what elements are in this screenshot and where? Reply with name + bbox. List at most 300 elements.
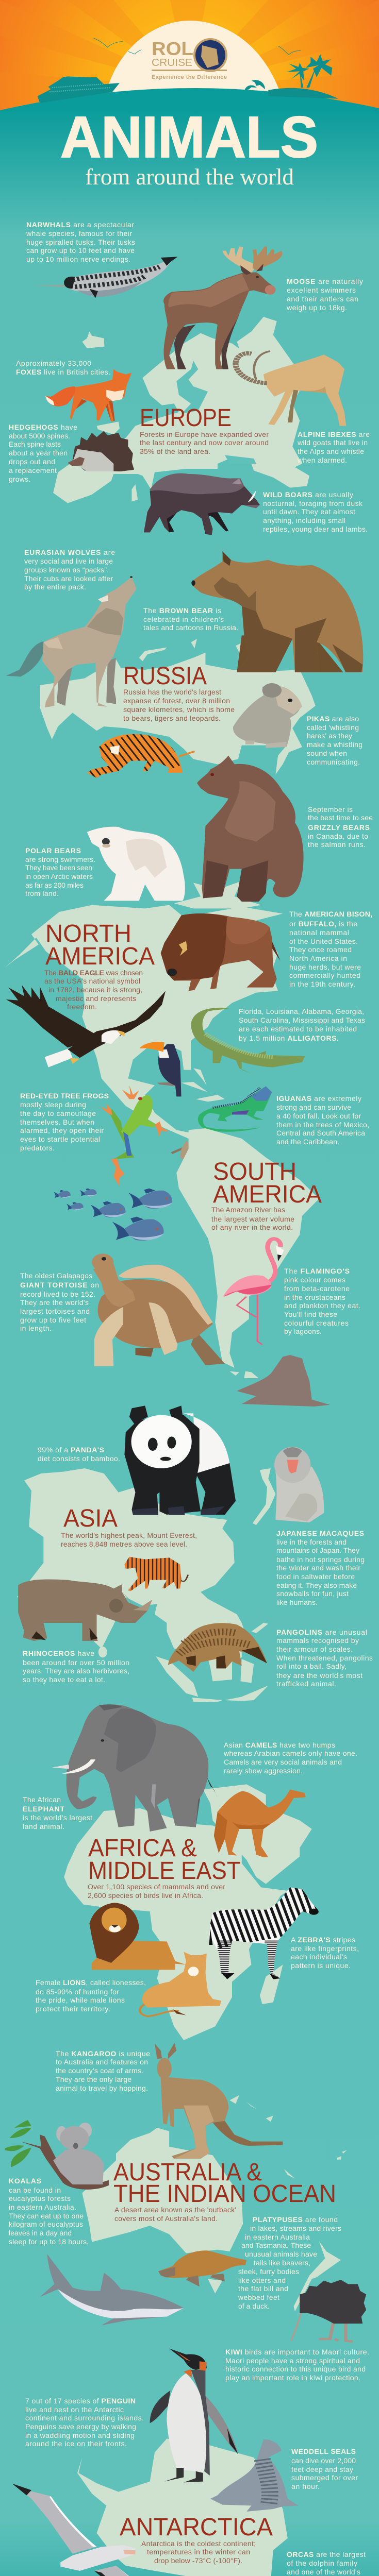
text: hedgehogs: HEDGEHOGS have <box>9 423 77 431</box>
text: grizzly bears: GRIZZLY BEARS <box>308 823 370 832</box>
text: Asia fact <box>61 1531 197 1548</box>
text: giant tortoise: record lived to be 152. <box>20 1290 95 1298</box>
text: alpine ibexes: ALPINE IBEXES are <box>298 430 370 438</box>
text: weddell seals: an hour. <box>291 2482 320 2490</box>
text: pangolins: mammals recognised by <box>276 1636 359 1645</box>
text: giant tortoise: The oldest Galapagos <box>20 1272 92 1280</box>
heading: Australia and the Indian Ocean: THE INDIAN OCEAN <box>113 2180 336 2208</box>
text: hedgehogs: about a year then <box>9 449 68 457</box>
panel: antarctica <box>12 2348 370 2576</box>
logo: ROL Cruise: ROL <box>152 38 193 59</box>
animal: kangaroo <box>155 2043 283 2159</box>
text: polar bears: POLAR BEARS <box>25 846 81 855</box>
text: narwhals: NARWHALS are a spectacular <box>26 221 134 229</box>
animal: alpine ibex <box>236 351 346 426</box>
text: iguanas: IGUANAS are extremely <box>276 1094 361 1103</box>
text: flamingo: colourful creatures <box>284 1319 349 1327</box>
text: Asia fact: The world's highest peak, Mount Everest, <box>61 1531 197 1539</box>
text: Europe fact: 35% of the land area. <box>140 447 210 455</box>
text: flamingo: pink colour comes <box>284 1276 345 1284</box>
animal: koala <box>5 2120 109 2190</box>
text: polar bears <box>25 846 95 897</box>
text: camels: Asian CAMELS have two humps <box>224 1741 335 1749</box>
text: alligators: Florida, Louisiana, Alabama, Georgia, <box>239 1007 364 1015</box>
text: moose: and their antlers can <box>287 295 358 303</box>
text: weddell seals: can dive over 2,000 <box>291 2456 356 2465</box>
text: pikas: hares' as they <box>307 732 352 740</box>
text: giant tortoise: GIANT TORTOISE on <box>20 1281 99 1289</box>
text: eurasian wolves: EURASIAN WOLVES are <box>24 548 115 556</box>
text: flamingo: in the crustaceans <box>284 1293 345 1301</box>
text: iguanas: and the Caribbean. <box>276 1138 339 1146</box>
text: platypuses: webbed feet <box>238 2293 279 2301</box>
text: orcas <box>287 2550 370 2576</box>
animal: great white shark <box>40 2254 184 2325</box>
panel: south america <box>20 1128 360 1406</box>
text: Russia fact <box>123 688 235 722</box>
text: hedgehogs: a replacement <box>9 466 57 474</box>
animal: flamingo <box>224 1239 284 1345</box>
text: moose: weigh up to 18kg. <box>286 303 347 312</box>
text: penguins: in a waddling motion and sliding <box>25 2431 135 2439</box>
text: narwhals: huge spiralled tusks. Their tusks <box>26 238 135 246</box>
text: Australia fact <box>114 2206 236 2223</box>
animal: eurasian wolf <box>6 576 137 707</box>
text: Africa fact: 2,600 species of birds live in Africa. <box>88 1891 203 1900</box>
panel: africa and middle east <box>23 1704 359 2040</box>
text: wild boars: anything, including small <box>263 516 345 524</box>
text: rhinoceros <box>23 1649 129 1684</box>
text: Europe fact: Forests in Europe have expanded over <box>140 430 269 438</box>
icon: dolphins <box>244 80 265 90</box>
panel: europe <box>9 221 370 535</box>
text: panda: 99% of a PANDA'S <box>38 1446 104 1454</box>
text: Asia fact: reaches 8,848 metres above sea level. <box>61 1540 187 1548</box>
text: polar bears: in open Arctic waters <box>25 872 93 880</box>
animal: alligator <box>191 1008 305 1073</box>
text: giant tortoise: grow up to five feet <box>20 1316 86 1324</box>
text: weddell seals <box>291 2447 358 2490</box>
text: camels: Camels are very social animals and <box>224 1758 342 1766</box>
text: japanese macaques: mountains of Japan. They <box>276 1546 359 1554</box>
text: grizzly bears: September is <box>308 805 353 814</box>
animal: grizzly bear <box>197 756 304 902</box>
text: american bison: commercially hunted <box>289 971 360 979</box>
text: hedgehogs: about 5000 spines. <box>9 432 70 440</box>
text: camels: whereas Arabian camels only have one. <box>223 1749 357 1757</box>
text: kangaroo: They are the only large <box>56 2075 131 2083</box>
text: penguins: Penguins save energy by walking <box>25 2422 136 2431</box>
text: iguanas: strong and can survive <box>276 1103 351 1111</box>
text: eurasian wolves: groups known as “packs”. <box>24 566 109 574</box>
heading: Australia and the Indian Ocean <box>113 2159 336 2208</box>
text: polar bears: They have been seen <box>25 863 92 872</box>
text: koalas: sleep for up to 18 hours. <box>9 2238 89 2246</box>
icon: seagulls <box>94 38 301 55</box>
text: kiwi: KIWI birds are important to Maori culture. <box>225 2348 369 2356</box>
text: american bison: or BUFFALO, is the <box>289 920 357 928</box>
text: platypuses: like otters and <box>238 2276 286 2284</box>
heading: North America: NORTH <box>45 920 131 947</box>
animal: fox <box>45 369 131 421</box>
text: alpine ibexes: the Alps and whistle <box>298 447 364 455</box>
text: lions: the pride, while male lions <box>36 1996 125 2004</box>
text: red-eyed tree frogs: eyes to startle potential <box>20 1135 100 1143</box>
text: flamingo: from beta-carotene <box>284 1284 350 1293</box>
text: Amazon fact: the largest water volume <box>211 1215 294 1223</box>
text: kiwi <box>225 2348 369 2382</box>
text: red-eyed tree frogs <box>20 1092 109 1152</box>
heading: South America: AMERICA <box>213 1181 322 1208</box>
text: platypuses: sleek, furry bodies <box>238 2267 299 2276</box>
text: Australia fact: covers most of Australia's land. <box>114 2214 218 2223</box>
text: red-eyed tree frogs: the day to camouflage <box>20 1109 96 1117</box>
text: american bison: in the 19th century. <box>289 980 355 988</box>
text: alpine ibexes <box>297 430 370 464</box>
text: platypuses: PLATYPUSES are found <box>253 2215 338 2224</box>
heading: Russia: RUSSIA <box>123 663 207 690</box>
text: giant tortoise <box>20 1272 99 1332</box>
text: platypuses: in eastern Australia <box>245 2233 310 2241</box>
panel: asia <box>17 1405 373 1702</box>
icon: cruise ship <box>38 76 120 103</box>
text: eurasian wolves <box>24 548 115 591</box>
text: american bison: The AMERICAN BISON, <box>289 910 372 918</box>
text: narwhals: up to 10 million nerve endings. <box>26 255 130 263</box>
text: giant tortoise: They are the world's <box>20 1298 89 1307</box>
text: platypuses: and Tasmania. These <box>241 2241 311 2249</box>
logo: ROL Cruise: CRUISE <box>152 57 192 69</box>
text: moose <box>286 277 363 312</box>
heading: Africa and Middle East: MIDDLE EAST <box>88 1857 241 1885</box>
animal: zebra <box>209 1887 319 1980</box>
heading: Europe: EUROPE <box>140 404 232 432</box>
text: flamingo: and plankton they eat. <box>284 1301 360 1310</box>
text: platypuses: unusual animals have <box>245 2250 317 2258</box>
heading: North America: AMERICA <box>45 943 155 970</box>
animal: elephant seal <box>237 1355 330 1406</box>
text: koalas: kilogram of eucalyptus <box>9 2220 83 2228</box>
map: south america <box>176 1128 319 1378</box>
animal: king penguin <box>150 2348 238 2482</box>
text: polar bears: from land. <box>25 889 59 897</box>
text: penguins: 7 out of 17 species of PENGUIN <box>25 2397 136 2405</box>
text: lions: do 85-90% of hunting for <box>36 1988 119 1996</box>
text: Africa fact: Over 1,100 species of mammals and over <box>88 1883 225 1891</box>
text: Antarctica fact: Antarctica is the coldest continent; <box>141 2539 256 2548</box>
text: iguanas: them in the trees of Mexico, <box>276 1121 369 1129</box>
text: american bison: national mammal <box>289 928 349 937</box>
text: wild boars: until dawn. They eat almost <box>263 507 355 516</box>
text: elephant: is the world's largest <box>23 1814 92 1822</box>
text: hedgehogs: grows. <box>9 475 30 483</box>
heading: Australia and the Indian Ocean: AUSTRALIA & <box>113 2159 262 2186</box>
text: narwhals <box>26 221 135 263</box>
text: grizzly bears: the salmon runs. <box>308 840 366 849</box>
map: asia <box>17 1468 275 1702</box>
text: koalas: leaves in a day and <box>9 2229 72 2237</box>
animal: japanese macaque <box>274 1447 324 1522</box>
text: moose: excellent swimmers <box>287 286 356 294</box>
text: wild boars: WILD BOARS are usually <box>263 490 353 499</box>
text: japanese macaques <box>276 1529 365 1606</box>
animal: rhinoceros <box>18 1580 152 1641</box>
text: american bison: They once roamed <box>289 945 352 954</box>
animal: kiwi <box>291 2280 366 2342</box>
animal: polar bear <box>87 827 185 901</box>
heading: Antarctica: ANTARCTICA <box>120 2514 273 2541</box>
text: pikas: communicating. <box>307 758 360 766</box>
animal: pangolin <box>168 1623 267 1672</box>
text: kiwi: play an important role in kiwi protection. <box>225 2374 360 2382</box>
text: red-eyed tree frogs: mostly sleep during <box>20 1100 86 1109</box>
text: alligators: are each estimated to be inhabited <box>239 1025 357 1033</box>
text: penguins: around the ice on their fronts. <box>25 2439 127 2448</box>
text: pangolins: trafficked animal. <box>276 1680 336 1688</box>
text: iguanas <box>276 1094 369 1146</box>
text: flamingo: by lagoons. <box>284 1327 322 1335</box>
animal: albatross <box>12 2484 162 2576</box>
text: kangaroo: to Australia and features on <box>56 2058 148 2066</box>
text: giant tortoise: largest tortoises and <box>20 1307 90 1315</box>
animal: bengal tiger <box>123 1557 189 1591</box>
text: american bison: of the United States. <box>289 937 358 945</box>
text: pikas: sound when <box>307 749 347 757</box>
text: zebras: are like fingerprints, <box>291 1944 359 1953</box>
icon: island with palms <box>268 54 338 99</box>
text: koalas: can be found in <box>9 2186 61 2194</box>
text: foxes: FOXES live in British cities. <box>16 368 110 376</box>
text: camels <box>223 1741 357 1775</box>
text: koalas: KOALAS <box>9 2177 41 2185</box>
text: alligators: South Carolina, Mississippi and Texas <box>239 1016 365 1024</box>
text: eurasian wolves: Their cubs are looked after <box>24 574 113 583</box>
map: russia <box>40 639 316 774</box>
animal: giant panda <box>124 1405 236 1515</box>
text: american bison: huge herds, but were <box>289 963 361 971</box>
text: eurasian wolves: by the entire pack. <box>24 583 86 591</box>
animal: siberian tiger <box>87 734 194 778</box>
text: grizzly bears: in Canada, due to <box>308 832 368 840</box>
animal: toucan <box>140 1042 182 1096</box>
text: pikas: called 'whistling <box>307 723 359 732</box>
animal: bald eagle <box>6 985 166 1067</box>
text: iguanas: a 40 foot fall. Look out for <box>276 1112 361 1120</box>
text: pangolins: they are the world's most <box>276 1671 362 1680</box>
text: kangaroo: The KANGAROO is unique <box>56 2049 150 2058</box>
text: brown bear <box>143 606 238 632</box>
text: red-eyed tree frogs: RED-EYED TREE FROGS <box>20 1092 109 1100</box>
text: platypuses <box>238 2215 341 2310</box>
text: alligators: by 1.5 million ALLIGATORS. <box>239 1034 339 1042</box>
text: koalas <box>9 2177 89 2246</box>
text: penguins: live and nest on the Antarctic <box>25 2405 124 2414</box>
heading: South America: SOUTH <box>213 1158 296 1185</box>
text: flamingo <box>284 1267 360 1335</box>
text: pangolins: roll into a ball. Sadly, <box>276 1662 347 1670</box>
text: bald eagle: in 1782, because it is strong, <box>48 986 142 994</box>
animal: piranhas <box>54 1189 172 1241</box>
text: Amazon fact: The Amazon River has <box>211 1206 285 1214</box>
text: alligators <box>239 1007 365 1042</box>
text: bald eagle <box>44 969 143 1011</box>
text: bald eagle: The BALD EAGLE was chosen <box>44 969 143 977</box>
text: pangolins: When threatened, pangolins <box>276 1654 373 1662</box>
text: narwhals: can grow up to 10 feet and have <box>26 246 135 255</box>
text: Australia fact: A desert area known as the 'outback' <box>114 2206 236 2214</box>
animal: moose <box>163 246 283 369</box>
logo: ROL Cruise: Experience the Difference <box>152 74 227 80</box>
animal: wild boar <box>144 473 260 535</box>
text: kiwi: historic connection to this unique bird and <box>225 2365 366 2373</box>
heading: South America <box>213 1158 322 1208</box>
text: japanese macaques: the winter and wash their <box>276 1564 360 1572</box>
panel: header <box>0 0 379 190</box>
text: kiwi: Maori people have a strong spiritual and <box>225 2357 360 2365</box>
title: ANIMALS <box>60 105 318 170</box>
text: platypuses: tails like beavers, <box>254 2259 310 2267</box>
text: red-eyed tree frogs: alarmed, they open their <box>20 1126 104 1134</box>
text: zebras: each individual's <box>291 1953 347 1961</box>
text: elephant: ELEPHANT <box>23 1805 64 1813</box>
text: flamingo: You'll find these <box>284 1310 337 1318</box>
animal: african elephant <box>52 1704 218 1832</box>
text: Africa fact <box>88 1883 225 1900</box>
text: Russia fact: to bears, tigers and leopards. <box>123 714 221 722</box>
heading: North America <box>45 920 155 970</box>
sea horizon <box>0 88 379 167</box>
text: wild boars: reptiles, young deer and lambs. <box>263 525 368 533</box>
text: zebras <box>291 1936 359 1970</box>
text: brown bear: The BROWN BEAR is <box>143 606 221 615</box>
text: pangolins <box>276 1628 373 1688</box>
text: japanese macaques: like humans. <box>276 1598 318 1606</box>
sun <box>106 21 281 95</box>
text: rhinoceros: years. They are also herbivores, <box>23 1667 129 1675</box>
text: panda <box>38 1446 120 1463</box>
text: Antarctica fact: temperatures in the winter can <box>147 2548 250 2556</box>
map: africa and arabia <box>64 1784 312 2040</box>
text: Amazon fact <box>211 1206 294 1231</box>
animal: sloth <box>172 1138 208 1167</box>
text: zebras: pattern is unique. <box>291 1961 351 1970</box>
text: japanese macaques: bathe in hot springs during <box>276 1555 365 1564</box>
text: panda: diet consists of bamboo. <box>38 1454 120 1463</box>
logo: ROL Cruise <box>152 38 227 80</box>
map: australia and new zealand <box>82 2095 347 2312</box>
text: koalas: in eastern Australia. <box>9 2203 76 2211</box>
text: orcas: and one of the world's <box>287 2568 360 2576</box>
text: narwhals: whale species, famous for their <box>26 229 132 238</box>
text: foxes: Approximately 33,000 <box>16 359 91 367</box>
map: europe <box>53 317 309 503</box>
animal: narwhal <box>34 257 178 298</box>
text: japanese macaques: live in the forests and <box>276 1538 347 1546</box>
animal: brown bear <box>191 551 363 672</box>
animal: male lion <box>89 1903 186 1970</box>
animal: weddell seal <box>210 2439 299 2512</box>
text: japanese macaques: snowballs for fun, just <box>276 1589 349 1598</box>
text: japanese macaques: JAPANESE MACAQUES <box>276 1529 364 1537</box>
text: platypuses: of a duck. <box>238 2302 270 2310</box>
text: Russia fact: square kilometres, which is home <box>123 705 235 714</box>
text: bald eagle: majestic and represents <box>56 994 136 1003</box>
text: american bison: North America in <box>289 954 347 962</box>
text: alpine ibexes: wild goats that live in <box>297 438 368 447</box>
text: kangaroo: the country's coat of arms. <box>56 2066 143 2075</box>
text: grizzly bears <box>308 805 373 849</box>
text: pikas: make a whistling <box>307 740 362 749</box>
text: kangaroo: animal to travel by hopping. <box>56 2084 148 2092</box>
text: weddell seals: WEDDELL SEALS <box>291 2447 356 2455</box>
text: bald eagle: freedom. <box>67 1003 97 1011</box>
animal: american bison <box>161 913 281 991</box>
text: Amazon fact: of any river in the world. <box>211 1223 293 1231</box>
text: koalas: eucalyptus forests <box>9 2194 71 2202</box>
text: weddell seals: feet deep and stay <box>291 2465 353 2473</box>
text: rhinoceros: RHINOCEROS have <box>23 1649 94 1657</box>
text: pikas <box>307 715 362 766</box>
panel: australia and the indian ocean <box>5 2043 369 2382</box>
text: bald eagle: as the USA's national symbol <box>44 977 140 985</box>
text: rhinoceros: been around for over 50 million <box>23 1658 129 1667</box>
heading: Africa and Middle East <box>88 1835 241 1885</box>
text: pikas: PIKAS are also <box>307 715 359 723</box>
text: Antarctica fact <box>141 2539 256 2565</box>
text: grizzly bears: the best time to see <box>308 814 373 822</box>
text: foxes <box>16 359 110 376</box>
animal: green iguana <box>198 1086 272 1132</box>
text: alpine ibexes: when alarmed. <box>297 456 347 464</box>
text: elephant: land animal. <box>23 1822 64 1831</box>
text: wild boars <box>263 490 368 533</box>
text: japanese macaques: food in saltwater before <box>276 1572 355 1581</box>
sunset sky with rays <box>0 0 379 124</box>
text: polar bears: as far as 200 miles <box>25 881 84 889</box>
text: hedgehogs: drops out and <box>9 457 55 466</box>
panel: north america <box>5 756 373 1187</box>
text: flamingo: The FLAMINGO'S <box>284 1267 350 1275</box>
animal: hedgehog <box>68 431 134 471</box>
text: moose: MOOSE are naturally <box>287 277 363 285</box>
text: japanese macaques: eating it. They also make <box>276 1581 357 1589</box>
heading: Africa and Middle East: AFRICA & <box>88 1835 197 1862</box>
text: Antarctica fact: drop below -73°C (-100°F). <box>154 2556 242 2565</box>
map: antarctica <box>77 2438 288 2576</box>
animal: platypus <box>158 2250 246 2286</box>
text: pangolins: PANGOLINS are unusual <box>276 1628 367 1636</box>
text: hedgehogs <box>9 423 77 483</box>
text: eurasian wolves: very social and live in large <box>24 557 113 565</box>
text: brown bear: celebrated in children's <box>143 615 224 623</box>
panel: russia <box>6 548 363 778</box>
animal: giant tortoise <box>92 1253 225 1366</box>
text: penguins: continent and surrounding islands. <box>25 2414 144 2422</box>
text: orcas: of the dolphin family <box>287 2559 357 2567</box>
animal: red-eyed tree frog <box>101 1086 169 1187</box>
heading: Asia: ASIA <box>63 1505 118 1532</box>
text: lions <box>36 1978 146 2013</box>
text: lions: Female LIONS, called lionesses, <box>36 1978 146 1987</box>
text: red-eyed tree frogs: predators. <box>20 1144 55 1152</box>
animal: pika <box>233 683 302 748</box>
text: elephant <box>23 1795 92 1831</box>
text: pangolins: their armour of scales. <box>276 1645 353 1653</box>
text: penguins <box>25 2397 144 2448</box>
map: north america <box>5 881 283 1139</box>
text: elephant: The African <box>23 1795 61 1804</box>
text: rhinoceros: so they have to eat a lot. <box>23 1675 105 1684</box>
